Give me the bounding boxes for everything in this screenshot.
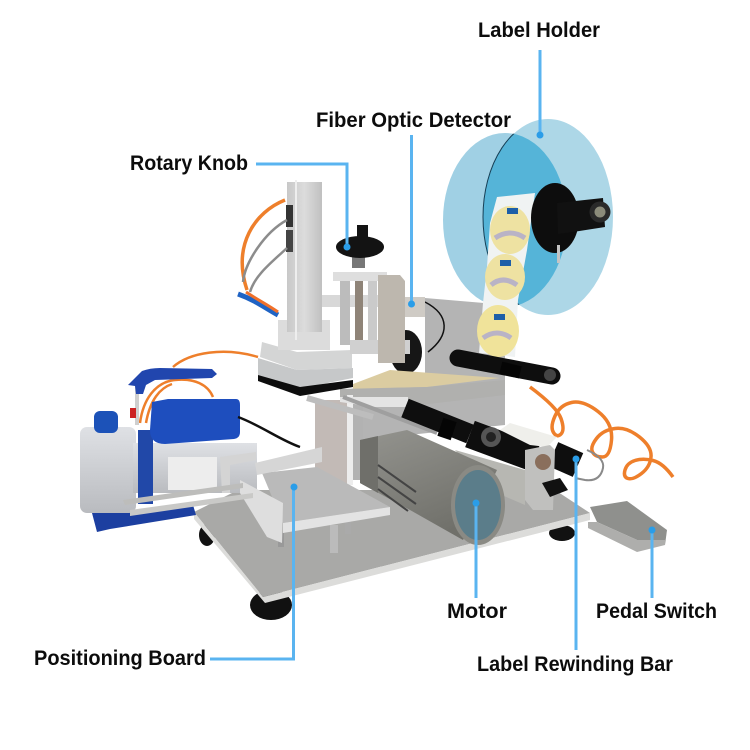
aluminium column bbox=[286, 180, 322, 340]
vacuum pump bbox=[80, 368, 300, 532]
pneumatic tubes left bbox=[238, 200, 287, 315]
callout: Fiber Optic Detector bbox=[316, 109, 511, 308]
callout: Label Rewinding Bar bbox=[477, 456, 673, 676]
black wheel bbox=[390, 330, 422, 374]
label holder discs bbox=[443, 119, 613, 315]
positioning board bbox=[123, 447, 390, 553]
callout: Positioning Board bbox=[34, 484, 298, 670]
callout: Rotary Knob bbox=[130, 152, 350, 250]
callout: Motor: Motor bbox=[447, 600, 507, 623]
base plate bbox=[194, 490, 590, 603]
labels sheet on table bbox=[353, 370, 500, 389]
lower roller bbox=[405, 408, 603, 510]
pedal switch bbox=[588, 501, 667, 552]
upper roller bbox=[458, 358, 556, 381]
table underside bbox=[340, 380, 505, 405]
orange air hose: right coil bbox=[530, 387, 673, 479]
rear panel bbox=[345, 298, 505, 440]
callout: Label Rewinding Bar: Label Rewinding Bar bbox=[477, 653, 673, 676]
callout: Label Holder bbox=[478, 19, 600, 138]
callout: Fiber Optic Detector: Fiber Optic Detector bbox=[316, 109, 511, 132]
rubber feet bbox=[199, 524, 575, 620]
silver guide behind motor bbox=[455, 450, 525, 505]
rotary knob bbox=[336, 225, 384, 268]
callout: Rotary Knob: Rotary Knob bbox=[130, 152, 248, 175]
callout: Motor bbox=[447, 500, 507, 623]
motor bbox=[360, 430, 505, 545]
orange air hose: top left bbox=[173, 352, 258, 367]
callout: Label Holder: Label Holder bbox=[478, 19, 600, 42]
column under table bbox=[307, 395, 437, 485]
sensor wires bbox=[425, 302, 444, 352]
sliding carriage and rods bbox=[322, 272, 410, 354]
slider block bbox=[258, 320, 353, 396]
callout: Positioning Board: Positioning Board bbox=[34, 647, 206, 670]
label strip bbox=[477, 193, 535, 357]
callout: Pedal Switch bbox=[596, 526, 717, 623]
bracket plate and sensor bbox=[378, 275, 425, 363]
machine illustration bbox=[80, 119, 673, 620]
spindle bbox=[531, 183, 610, 263]
callout: Pedal Switch: Pedal Switch bbox=[596, 600, 717, 623]
